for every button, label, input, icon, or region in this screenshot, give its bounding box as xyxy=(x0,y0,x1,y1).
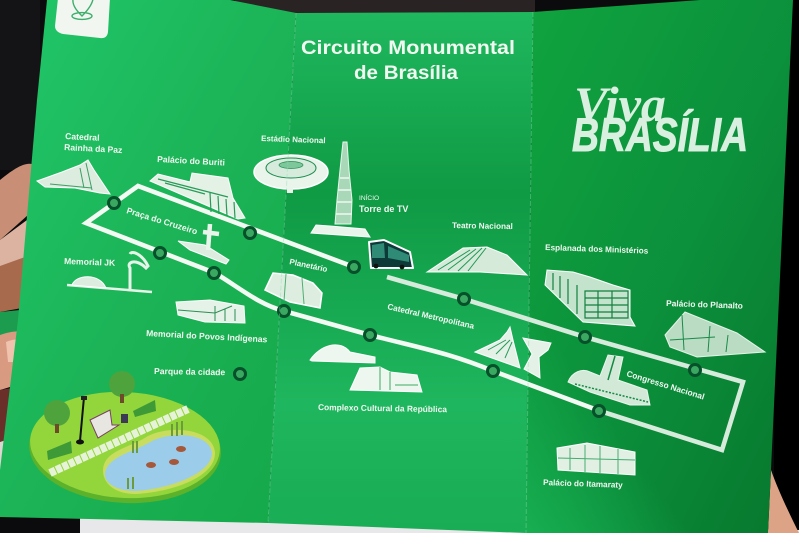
landmark: Parque da cidade: Parque da cidade xyxy=(154,366,226,377)
pond xyxy=(103,430,215,494)
bench xyxy=(90,410,119,438)
landmark: Complexo Cultural da República xyxy=(310,345,447,414)
landmark: Palácio do Planalto: Palácio do Planalto xyxy=(666,298,743,311)
landmark: Memorial JK xyxy=(64,252,152,292)
landmark: Catedral Rainha da Paz: Catedral xyxy=(65,131,100,143)
landmark: Complexo Cultural da República: Complexo Cultural da República xyxy=(318,402,447,414)
hand: left fingers xyxy=(0,164,47,470)
landmark: Catedral Metropolitana xyxy=(387,302,551,378)
landmark: Teatro Nacional: Teatro Nacional xyxy=(452,221,513,231)
landmark: Palácio do Buriti: Palácio do Buriti xyxy=(157,154,225,168)
landmark: Palácio do Planalto xyxy=(665,298,765,357)
landmark: Esplanada dos Ministérios: Esplanada dos Ministérios xyxy=(545,243,649,256)
route line xyxy=(86,186,743,450)
logo: Viva Brasília xyxy=(572,76,748,161)
landmark: Palácio do Itamaraty: Palácio do Itamaraty xyxy=(543,478,623,490)
landmark: Memorial dos Povos Indígenas: Memorial do Povos Indígenas xyxy=(146,328,268,344)
hedges xyxy=(133,400,156,417)
stone path xyxy=(50,409,188,473)
title: de Brasília xyxy=(354,63,458,84)
icon: bus xyxy=(369,240,413,269)
landmark: Catedral Rainha da Paz: Rainha da Paz xyxy=(64,142,123,155)
landmark: Praça do Cruzeiro xyxy=(125,205,229,264)
landmark: Esplanada dos Ministérios xyxy=(545,243,649,326)
illustration: park xyxy=(26,371,224,508)
ducks xyxy=(146,446,186,468)
logo tile xyxy=(55,0,110,38)
landmark: Palácio do Itamaraty xyxy=(543,443,635,490)
icon: map pin xyxy=(72,0,93,19)
landmark: Congresso Nacional: Congresso Nacional xyxy=(625,368,706,402)
landmark: Torre de TV xyxy=(311,142,408,237)
hand: right fingers xyxy=(692,470,799,533)
fold lines xyxy=(268,12,533,533)
landmark: Memorial dos Povos Indígenas xyxy=(146,300,268,344)
title: Circuito Monumental xyxy=(301,38,515,59)
landmark: Palácio do Buriti xyxy=(150,154,245,219)
landmark: Torre de TV: INÍCIO xyxy=(359,193,379,202)
shading: bottom light on right panel xyxy=(526,300,690,533)
landmark: Planetário: Planetário xyxy=(289,257,328,274)
route stops xyxy=(108,198,700,416)
landmark: Planetário xyxy=(265,257,328,308)
paper panel: middle xyxy=(268,12,533,533)
reeds xyxy=(128,421,182,489)
landmark: Praça do Cruzeiro: Praça do Cruzeiro xyxy=(125,205,199,236)
landmark: Catedral Rainha da Paz xyxy=(37,131,123,194)
logo: Viva Brasília: BRASÍLIA xyxy=(572,108,748,161)
landmark: Torre de TV: Torre de TV xyxy=(359,204,408,214)
paper panel: right xyxy=(526,0,793,533)
title xyxy=(301,38,515,84)
landmark: Catedral Metropolitana: Catedral Metropolitana xyxy=(387,302,475,331)
landmark: Memorial JK: Memorial JK xyxy=(64,256,116,268)
landmark: Teatro Nacional xyxy=(427,221,527,275)
landmark: Congresso Nacional xyxy=(568,355,706,405)
landmark: Estádio Nacional xyxy=(254,134,328,193)
lamp post xyxy=(80,397,84,441)
paper panel: left xyxy=(0,0,296,523)
trees xyxy=(44,400,70,426)
logo: Viva Brasília: Viva xyxy=(574,76,666,132)
landmark: Estádio Nacional: Estádio Nacional xyxy=(261,134,326,145)
